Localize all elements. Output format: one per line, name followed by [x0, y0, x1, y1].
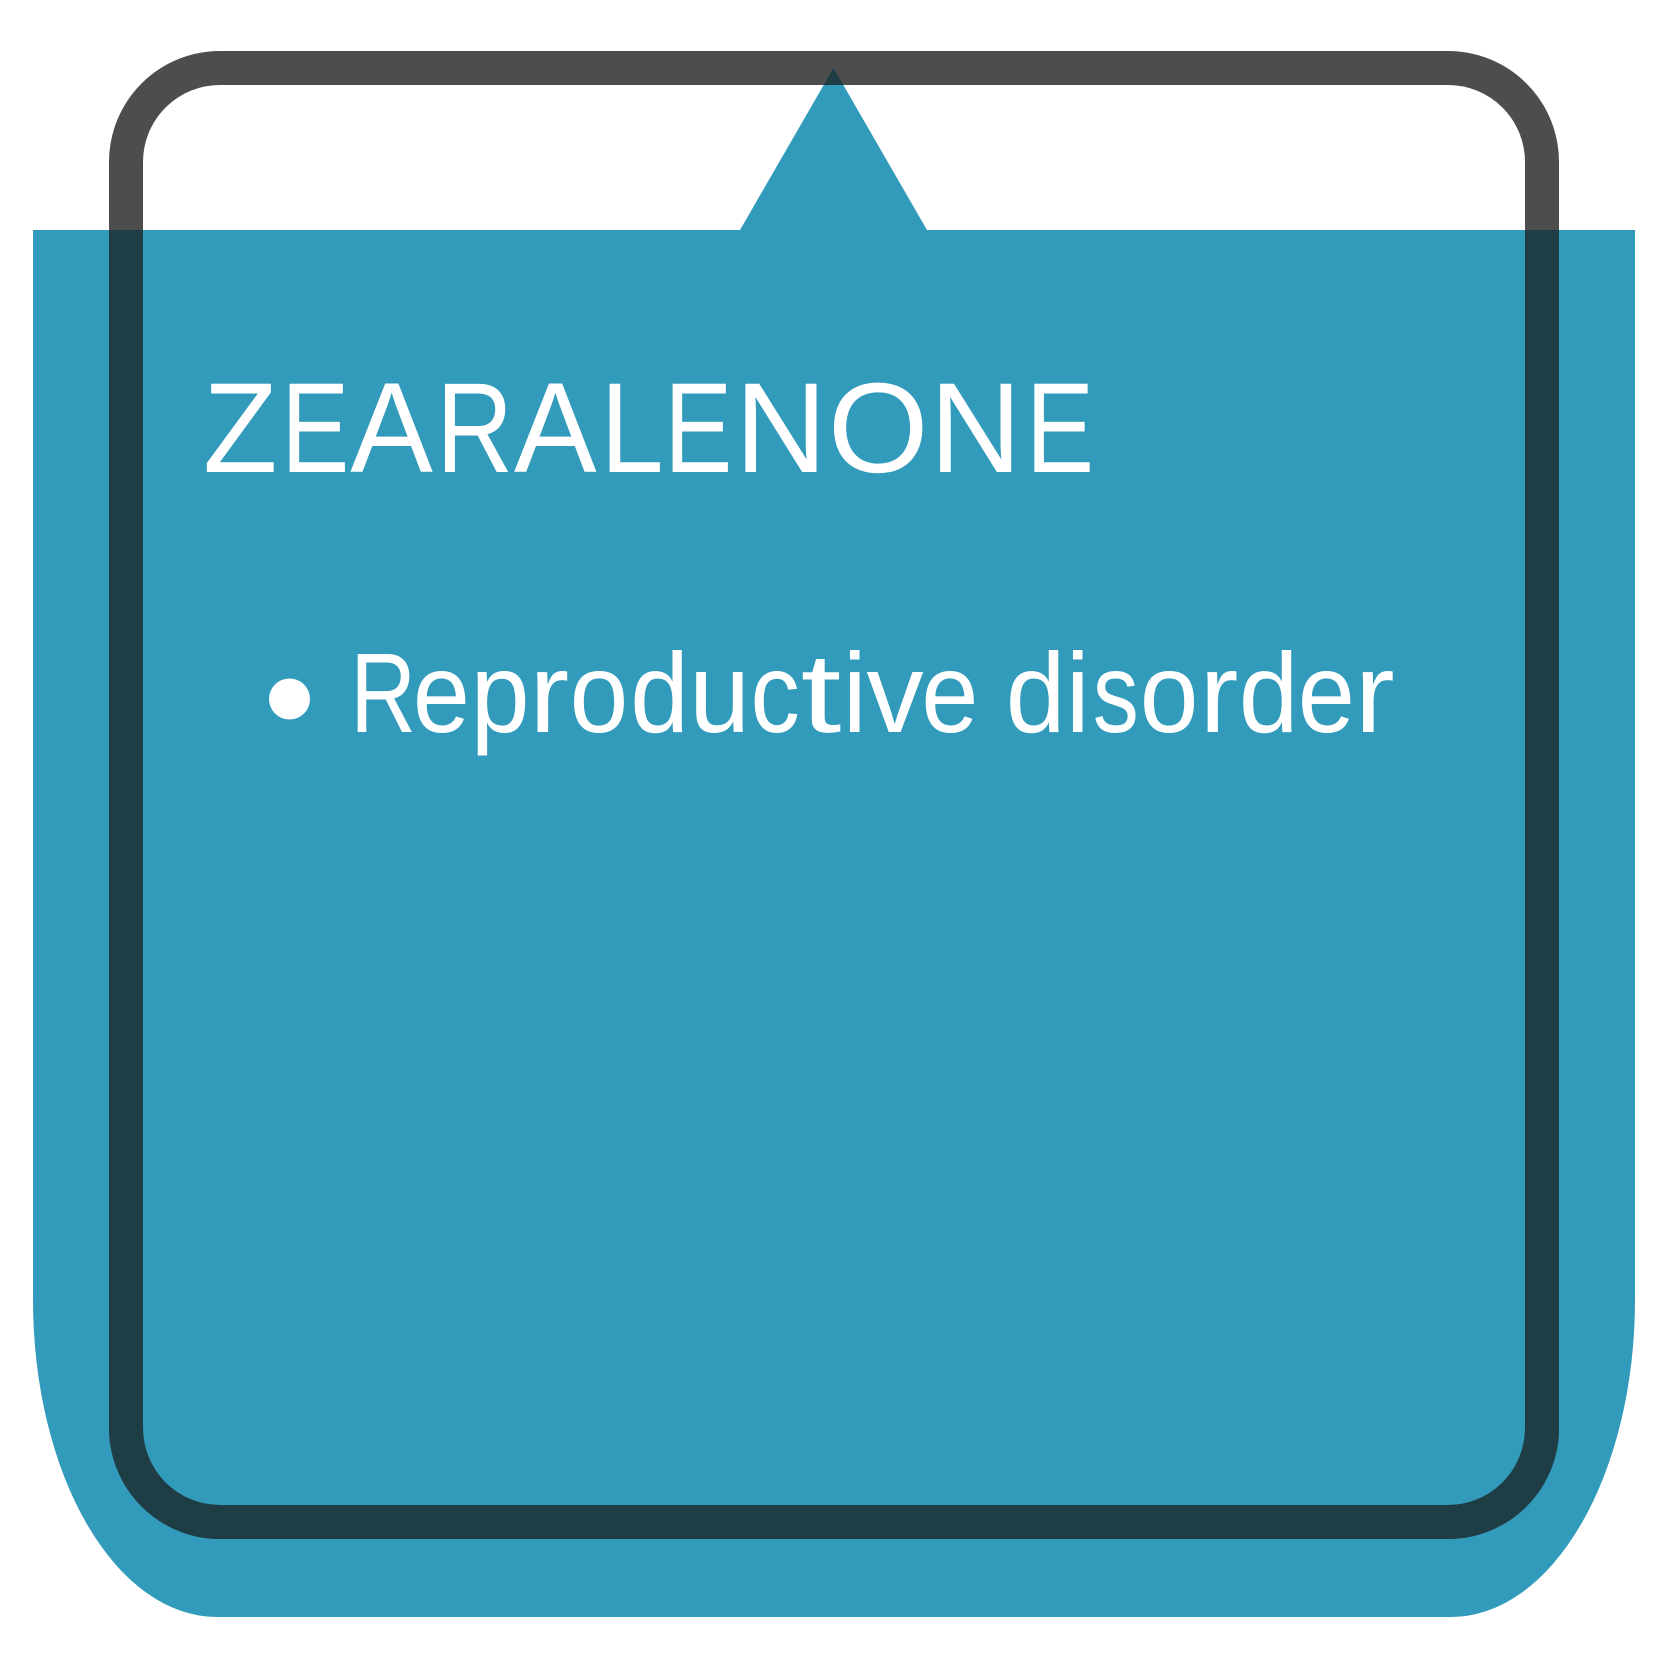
bullet text: r [1200, 630, 1238, 756]
bullet text: r [529, 630, 569, 756]
bullet text: e [413, 630, 470, 756]
bullet text: e [1298, 630, 1355, 756]
bullet text: u [689, 630, 750, 756]
bullet text: d [630, 630, 689, 756]
bullet text: c [750, 630, 800, 756]
title: N [930, 357, 1022, 500]
bullet text: o [570, 630, 628, 756]
bullet text: p [471, 630, 530, 756]
title: A [350, 357, 433, 500]
bullet text: e [921, 630, 978, 756]
bullet text: i [843, 630, 867, 756]
bullet text: i [1066, 630, 1090, 756]
bullet text: s [1093, 630, 1139, 756]
title: E [664, 357, 732, 500]
title: N [735, 357, 827, 500]
title: A [514, 357, 597, 500]
title: Z [203, 357, 277, 500]
title: E [1026, 357, 1094, 500]
bullet text: d [1239, 630, 1298, 756]
bullet text: r [1355, 630, 1395, 756]
title: O [828, 357, 929, 500]
bullet text: d [1006, 630, 1066, 756]
bullet text: o [1140, 630, 1198, 756]
title: E [281, 357, 349, 500]
title: L [600, 357, 664, 500]
bullet item: reproductive disorder [269, 630, 1395, 756]
rounded frame outline [126, 68, 1542, 1522]
bullet text: v [866, 630, 924, 756]
bullet text: R [350, 630, 416, 756]
icon: bullet dot [269, 678, 310, 720]
title: R [436, 357, 513, 500]
bullet text: t [801, 630, 841, 756]
